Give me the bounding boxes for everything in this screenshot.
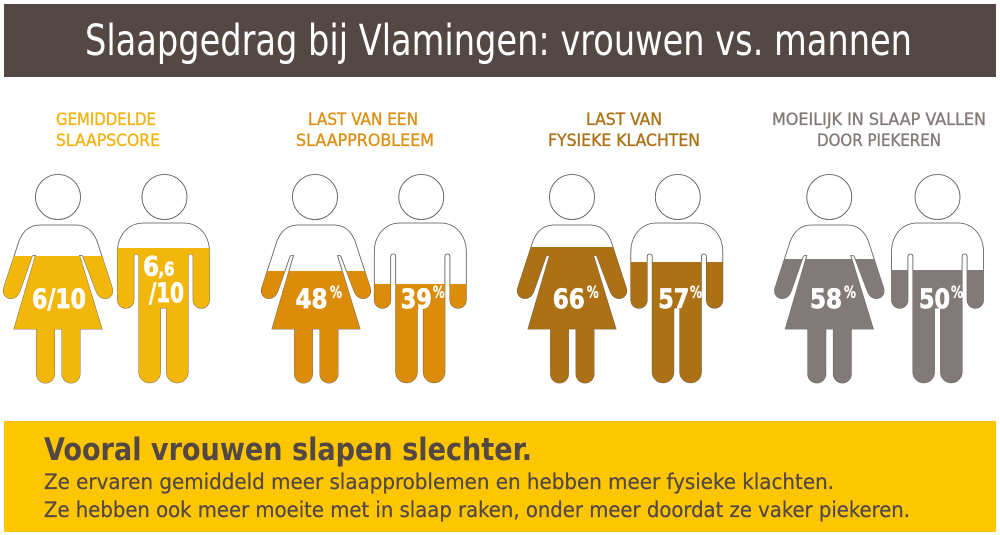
icon: woman 66%: [517, 174, 627, 383]
heading: last van een slaapprobleem: LAST VAN EEN: [308, 110, 418, 130]
icon: man 39%: 39: [401, 284, 432, 315]
icon: man 39%: [374, 174, 466, 383]
heading: last van fysieke klachten: FYSIEKE KLACHTEN: [548, 131, 700, 151]
icon: man 39%: %: [433, 283, 445, 303]
icon: woman 58%: [775, 174, 884, 383]
icon: woman 48%: %: [330, 283, 342, 303]
panel: gemiddelde slaapscore: [3, 110, 210, 383]
heading: last van een slaapprobleem: SLAAPPROBLEEM: [296, 131, 434, 151]
icon: man 57%: 57: [658, 284, 689, 315]
heading: last van een slaapprobleem: [296, 110, 434, 151]
heading: last van fysieke klachten: [548, 110, 700, 151]
icon: man 6,6/10: 6: [143, 252, 159, 282]
icon: man 57%: %: [690, 283, 702, 303]
heading: moeilijk in slaap vallen door piekeren: [772, 110, 986, 151]
icon: man 50%: [892, 174, 984, 383]
conclusion text: [44, 470, 910, 523]
conclusion heading: Vooral vrouwen slapen slechter.: [44, 432, 532, 468]
icon: man 50%: 50: [919, 284, 950, 315]
icon: man 6,6/10: /10: [149, 278, 184, 309]
conclusion text: Ze ervaren gemiddeld meer slaapproblemen en hebben meer fysieke klachten.: [44, 470, 834, 495]
heading: moeilijk in slaap vallen door piekeren: MOEILIJK IN SLAAP VALLEN: [772, 110, 986, 130]
heading: last van fysieke klachten: LAST VAN: [586, 110, 662, 130]
heading: gemiddelde slaapscore: GEMIDDELDE: [56, 110, 156, 130]
heading: gemiddelde slaapscore: [56, 110, 160, 151]
conclusion text: Ze hebben ook meer moeite met in slaap raken, onder meer doordat ze vaker piekeren.: [44, 498, 910, 523]
title banner: [4, 4, 996, 77]
icon: woman 48%: 48: [296, 284, 328, 315]
panel: last van een slaapprobleem: [261, 110, 466, 383]
icon: man 50%: %: [951, 283, 963, 303]
conclusion banner: [4, 421, 996, 532]
icon: woman 48%: [261, 174, 371, 383]
icon: woman 58%: 58: [810, 284, 842, 315]
icon: man 57%: [631, 174, 723, 383]
heading: moeilijk in slaap vallen door piekeren: DOOR PIEKEREN: [817, 131, 941, 151]
panel: last van fysieke klachten: [517, 110, 723, 383]
icon: woman 6/10: [3, 174, 113, 383]
icon: man 6,6/10: [118, 174, 210, 383]
icon: woman 58%: %: [844, 283, 856, 303]
icon: man 6,6/10: ,6: [158, 258, 174, 280]
icon: woman 66%: 66: [553, 284, 585, 315]
icon: woman 66%: %: [587, 283, 599, 303]
icon: woman 6/10: 6/10: [32, 284, 86, 315]
panel: moeilijk in slaap vallen: [772, 110, 986, 383]
heading: gemiddelde slaapscore: SLAAPSCORE: [56, 131, 160, 151]
